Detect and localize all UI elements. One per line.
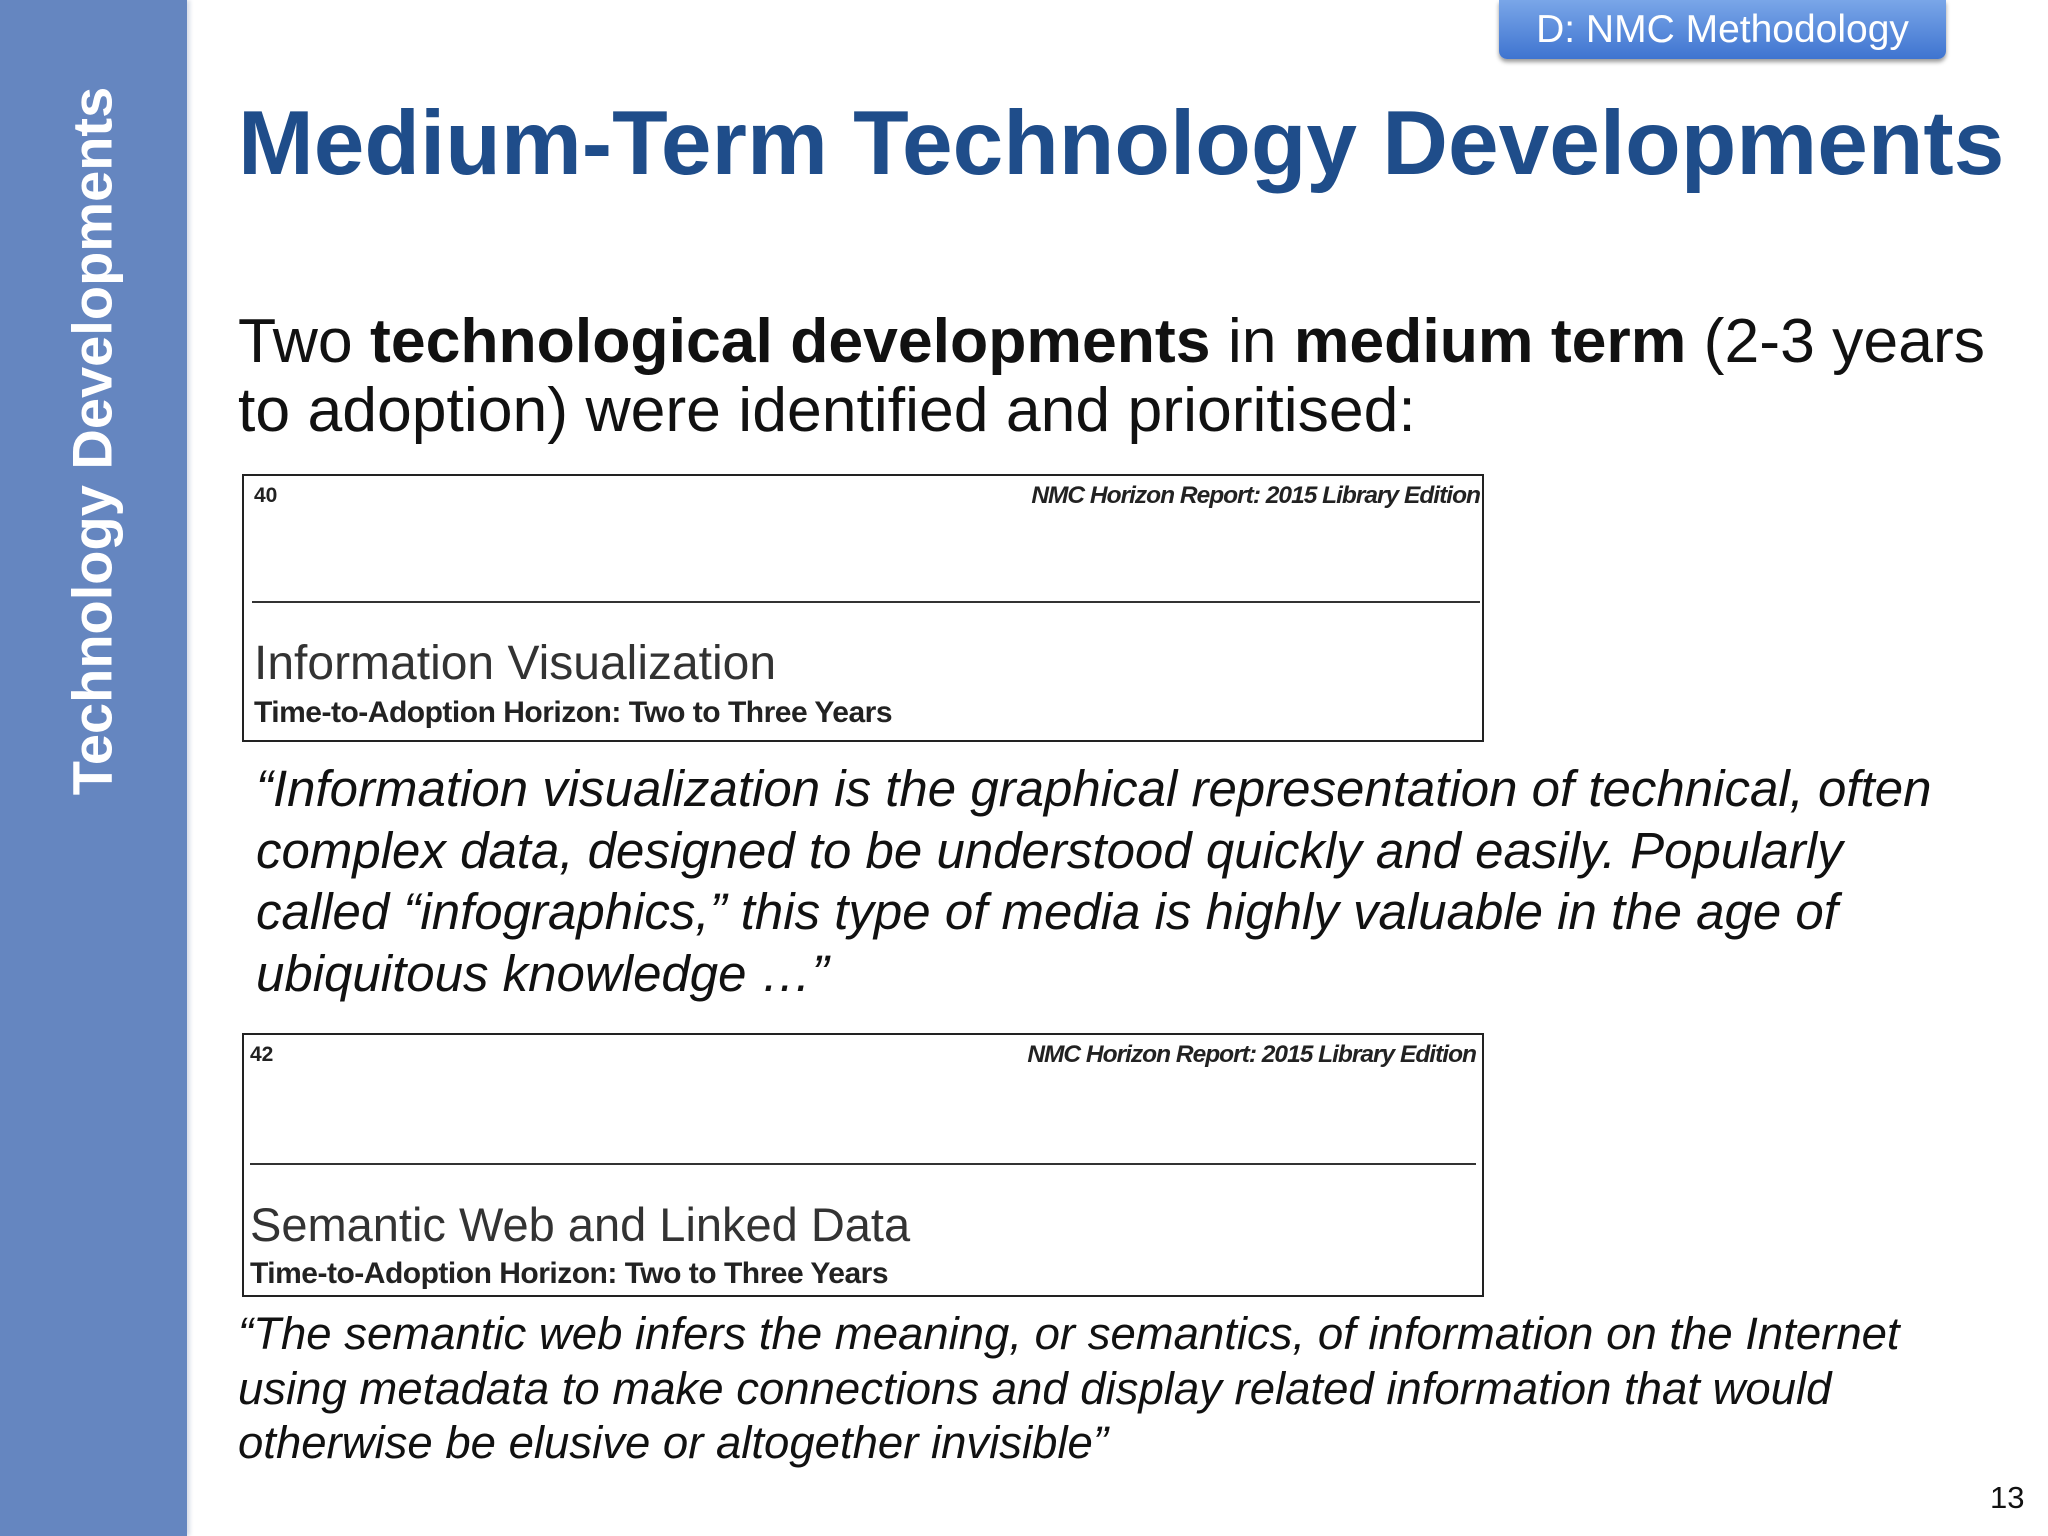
quote 1: called “infographics,” this type of media is highly valuable in the age of — [256, 883, 1838, 940]
panel: information visualization — [242, 474, 1484, 742]
quote 1 — [256, 760, 1931, 1002]
quote 2: using metadata to make connections and display related information that would — [238, 1362, 1831, 1414]
intro text: to adoption) were identified and prioritised: — [238, 375, 1416, 445]
intro text: Two technological developments in medium term (2-3 years — [238, 306, 1985, 376]
horizon: Time-to-Adoption Horizon: Two to Three Years — [250, 1257, 888, 1290]
report header: NMC Horizon Report: 2015 Library Edition — [1027, 1041, 1476, 1068]
heading: Semantic Web and Linked Data — [250, 1198, 910, 1251]
horizon: Time-to-Adoption Horizon: Two to Three Years — [254, 696, 892, 729]
report header: NMC Horizon Report: 2015 Library Edition — [1031, 482, 1480, 509]
tab: section label — [1499, 0, 1946, 59]
panel: semantic web — [242, 1033, 1484, 1297]
page number: 13 — [1990, 1480, 2024, 1515]
title: Medium-Term Technology Developments — [238, 93, 2004, 194]
sidebar title: Technology Developments — [60, 87, 124, 795]
sidebar — [0, 0, 187, 1536]
quote 2: otherwise be elusive or altogether invisible” — [238, 1417, 1108, 1468]
quote 2: “The semantic web infers the meaning, or semantics, of information on the Internet — [238, 1308, 1900, 1359]
quote 1: complex data, designed to be understood quickly and easily. Popularly — [256, 822, 1843, 878]
page number 42: 42 — [250, 1043, 273, 1066]
heading: Information Visualization — [254, 637, 776, 690]
tab: section label: D: NMC Methodology — [1536, 8, 1909, 51]
intro text — [238, 306, 1985, 445]
page number 40: 40 — [254, 484, 277, 507]
quote 1: “Information visualization is the graphical representation of technical, often — [256, 760, 1931, 817]
quote 2 — [238, 1308, 1902, 1468]
quote 1: ubiquitous knowledge …” — [256, 944, 829, 1002]
